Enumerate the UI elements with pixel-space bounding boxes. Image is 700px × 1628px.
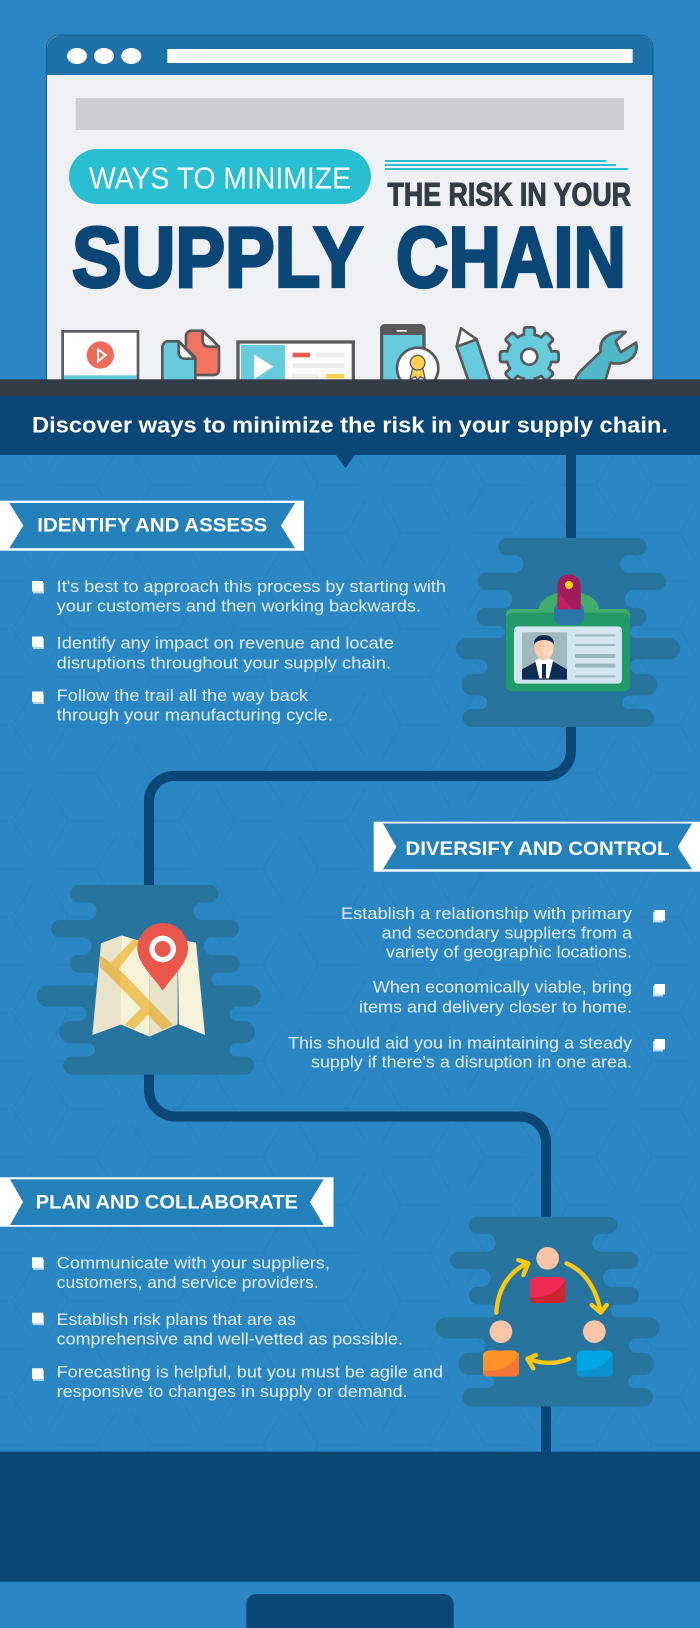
footer button <box>246 1594 454 1628</box>
section 1 bullets: through your manufacturing cycle. <box>57 706 333 725</box>
dark strip <box>0 379 700 396</box>
window title bar <box>47 35 652 75</box>
icon: id badge <box>506 574 630 691</box>
section 2 bullets: and secondary suppliers from a <box>382 923 633 942</box>
intro banner <box>0 396 700 468</box>
section 3 bullets <box>32 1253 443 1401</box>
footer band <box>0 1452 700 1582</box>
blob: id badge background <box>456 538 680 727</box>
section 1 ribbon: identify and assess <box>0 501 304 551</box>
section 3 ribbon: plan and collaborate: PLAN AND COLLABORATE <box>36 1191 298 1213</box>
section 1 bullets: your customers and then working backwards. <box>57 597 421 616</box>
blob: people background <box>436 1217 660 1406</box>
browser window hero <box>46 35 653 392</box>
section 1 ribbon: identify and assess: IDENTIFY AND ASSESS <box>37 515 267 537</box>
intro banner: Discover ways to minimize the risk in your supply chain. <box>32 412 668 437</box>
heading: supply chain <box>72 211 626 306</box>
section 3 bullets: comprehensive and well-vetted as possible. <box>57 1329 403 1348</box>
window frame <box>46 35 653 380</box>
person: top red <box>530 1247 565 1303</box>
icon: video screen <box>238 342 353 389</box>
section 2 bullets: supply if there's a disruption in one area. <box>311 1053 632 1072</box>
icon: map with pin <box>92 923 205 1037</box>
section 1 bullets: It's best to approach this process by starting with <box>57 577 446 596</box>
cycle arrows <box>496 1260 607 1368</box>
icon: pencil <box>457 328 493 390</box>
section 2 bullets: variety of geographic locations. <box>386 943 632 962</box>
section 2 bullets: When economically viable, bring <box>373 978 632 997</box>
person: left orange <box>483 1320 519 1376</box>
section 2 bullets: This should aid you in maintaining a steady <box>288 1033 633 1052</box>
teal accent lines <box>385 160 628 170</box>
section 3 bullets: responsive to changes in supply or demand. <box>57 1382 408 1401</box>
section 3 bullets: customers, and service providers. <box>57 1273 319 1292</box>
connector path <box>149 455 571 1452</box>
pill: ways to minimize <box>69 149 371 204</box>
section 1 bullets: Identify any impact on revenue and locate <box>57 634 394 653</box>
icon: gear <box>499 326 560 387</box>
icon: video player <box>63 331 138 388</box>
section 2 ribbon: diversify and control <box>374 822 700 872</box>
section 1 bullets: Follow the trail all the way back <box>57 686 309 705</box>
section 1 bullets: disruptions throughout your supply chain. <box>57 653 391 672</box>
pill: ways to minimize: WAYS TO MINIMIZE <box>89 160 351 195</box>
person: right blue <box>577 1320 613 1376</box>
section 2 bullets: Establish a relationship with primary <box>341 904 633 923</box>
heading: supply chain: SUPPLY <box>72 211 363 306</box>
icon: wrench <box>573 332 637 387</box>
section 3 bullets: Communicate with your suppliers, <box>57 1253 330 1272</box>
icon: three people with cycle arrows <box>483 1247 613 1376</box>
section 2 ribbon: diversify and control: DIVERSIFY AND CONTROL <box>405 838 670 860</box>
heading: supply chain: CHAIN <box>396 211 626 306</box>
section 2 bullets <box>288 904 665 1072</box>
section 2 bullets: items and delivery closer to home. <box>359 997 632 1016</box>
blob: map background <box>37 885 261 1075</box>
section 3 bullets: Establish risk plans that are as <box>57 1310 296 1329</box>
section 3 bullets: Forecasting is helpful, but you must be agile and <box>57 1362 443 1381</box>
icon: phone with award badge <box>380 324 438 392</box>
section 3 ribbon: plan and collaborate <box>0 1177 334 1227</box>
section 1 bullets <box>32 577 446 725</box>
icon: documents <box>162 331 219 390</box>
grey placeholder bar <box>76 98 624 130</box>
heading: the risk in your: THE RISK IN YOUR <box>388 176 631 212</box>
